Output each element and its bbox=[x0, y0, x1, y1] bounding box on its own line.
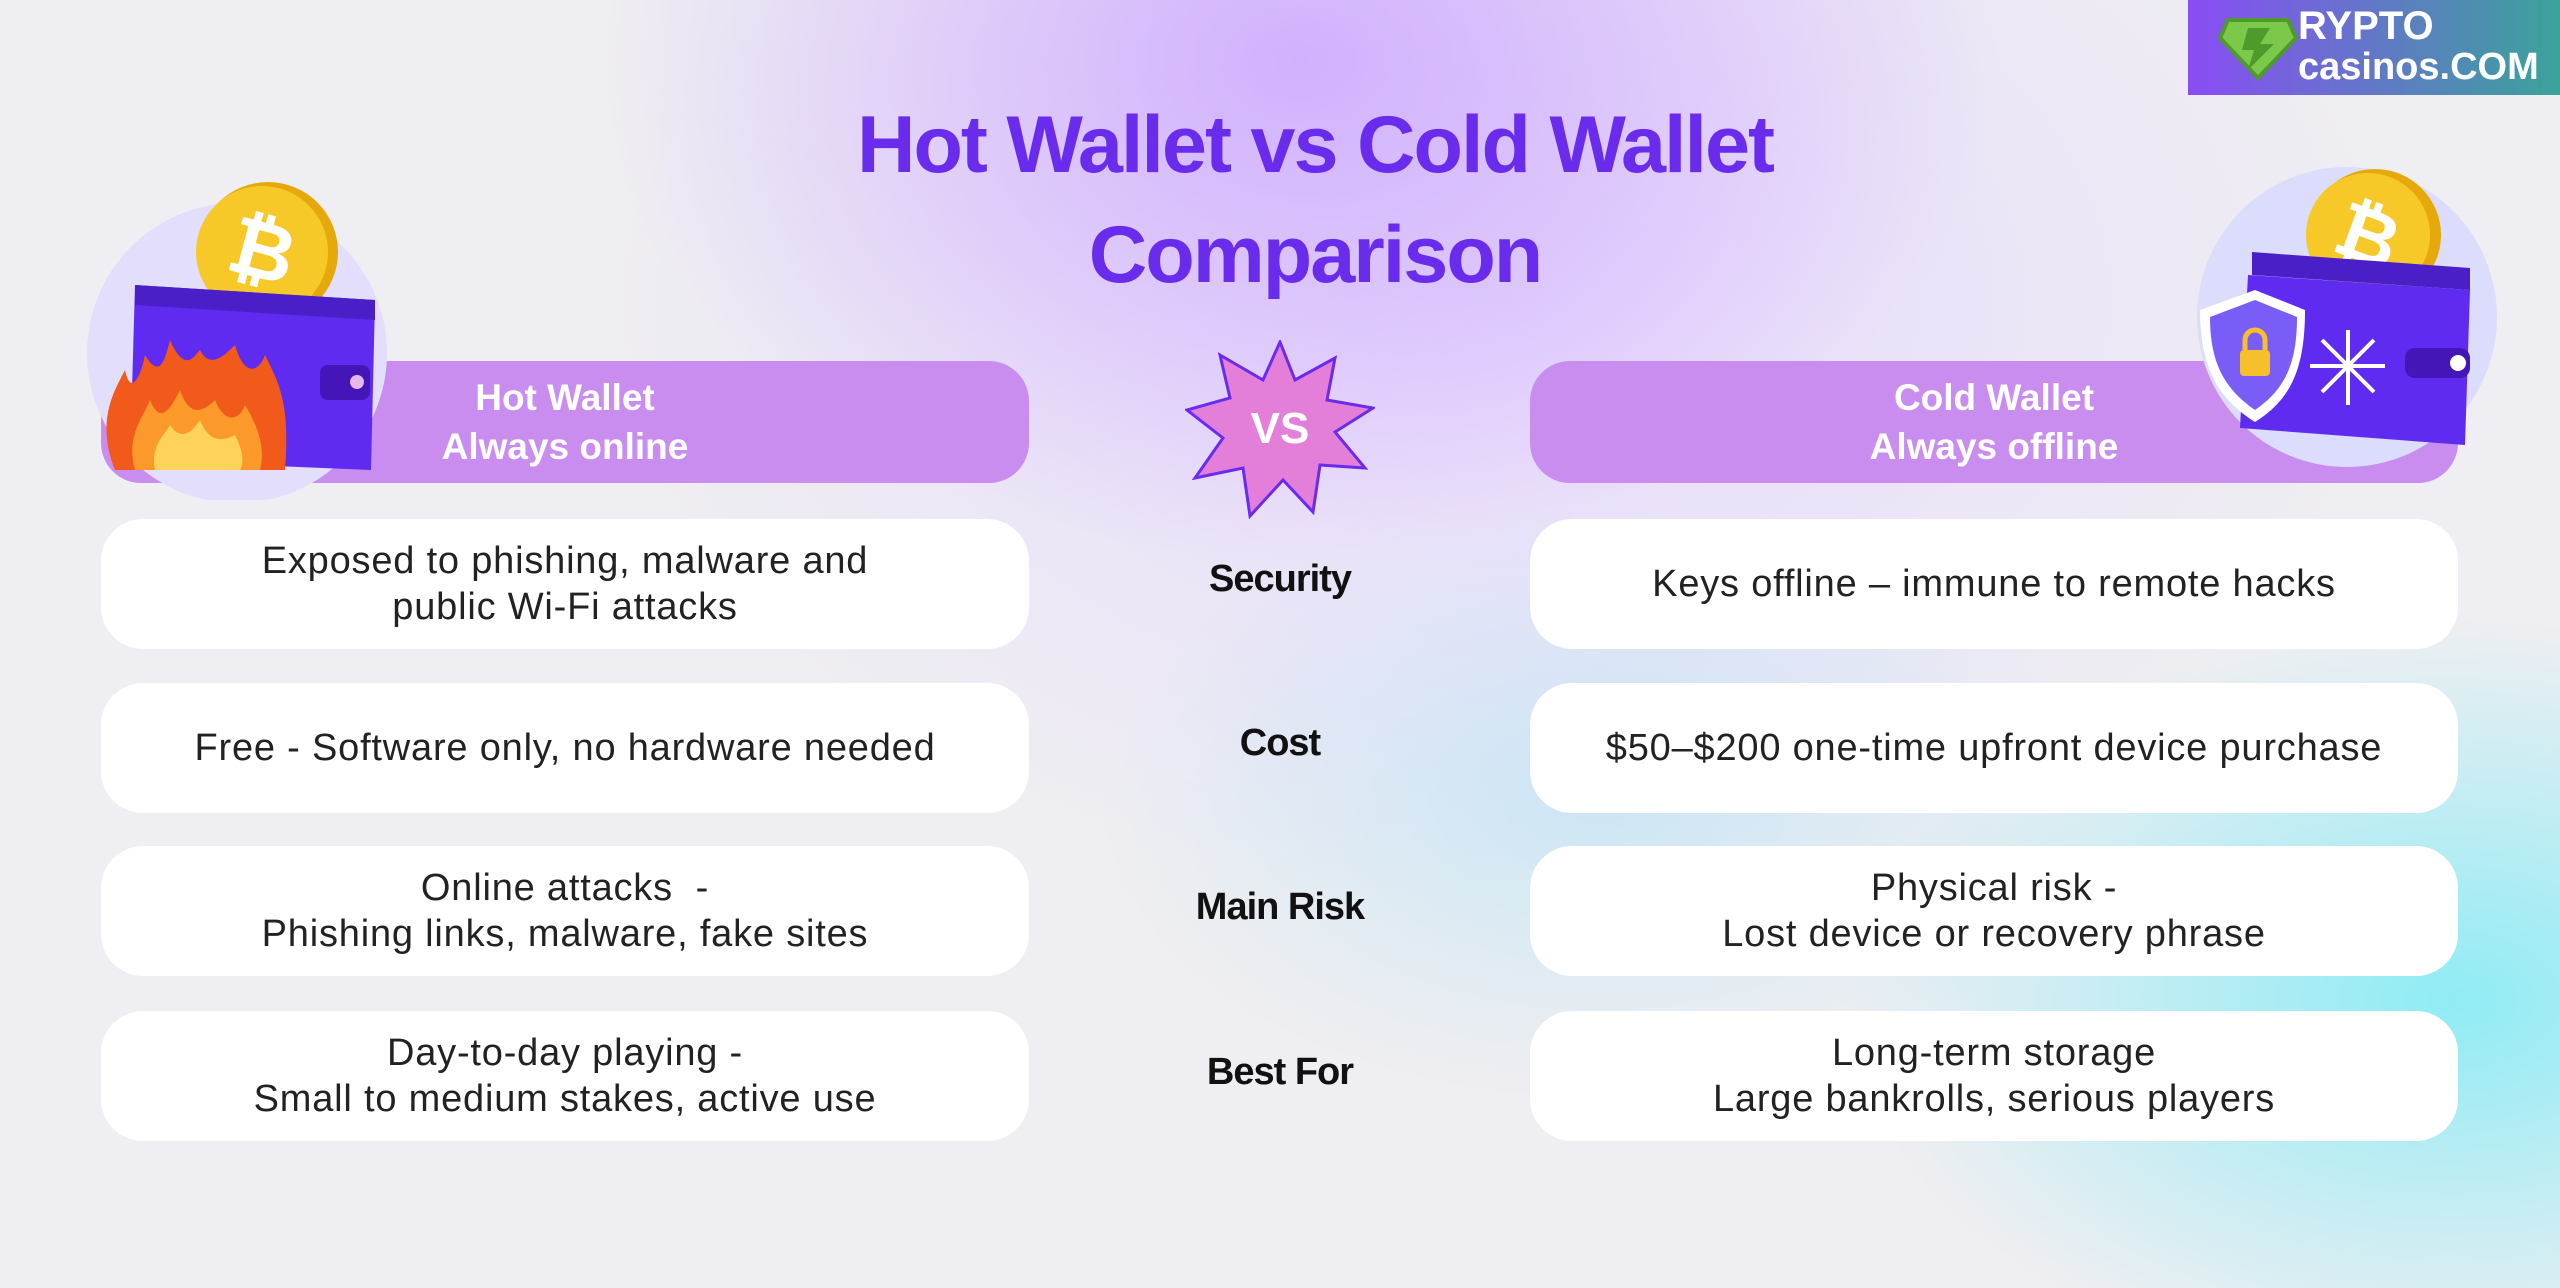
text: Long-term storage bbox=[1832, 1032, 2156, 1074]
label: cost: Cost bbox=[1240, 722, 1320, 764]
row 2: cost bbox=[101, 683, 1029, 813]
text: $50–$200 one-time upfront device purchase bbox=[1606, 727, 2382, 769]
text: Physical risk - bbox=[1871, 867, 2117, 909]
row 4: best for bbox=[101, 1011, 1029, 1141]
text: Large bankrolls, serious players bbox=[1713, 1078, 2275, 1120]
row 3: main risk: Online attacks - bbox=[421, 867, 709, 909]
row 1: security bbox=[101, 519, 1029, 649]
row 4: best for: Day-to-day playing - bbox=[387, 1032, 743, 1074]
icon: cold wallet: ₿ bbox=[2324, 186, 2411, 287]
header: cold wallet: Cold Wallet bbox=[1894, 377, 2094, 418]
icon: VS starburst bbox=[1185, 340, 1375, 520]
icon: VS starburst: VS bbox=[1251, 404, 1309, 453]
row 1: security: Exposed to phishing, malware and bbox=[262, 540, 868, 582]
text: Lost device or recovery phrase bbox=[1722, 913, 2266, 955]
row 4: best for: Small to medium stakes, active use bbox=[254, 1078, 876, 1120]
header: cold wallet bbox=[1530, 361, 2458, 483]
icon: cold wallet bbox=[2197, 167, 2497, 467]
label: best for: Best For bbox=[1207, 1051, 1353, 1093]
row 3: main risk bbox=[101, 846, 1029, 976]
logo text: RYPTO bbox=[2298, 4, 2434, 48]
label: main risk: Main Risk bbox=[1196, 886, 1364, 928]
icon: hot wallet bbox=[87, 182, 387, 500]
logo text: casinos.COM bbox=[2298, 46, 2539, 88]
text: Keys offline – immune to remote hacks bbox=[1652, 563, 2336, 605]
logo bbox=[2188, 0, 2560, 95]
icon: hot wallet: ₿ bbox=[219, 199, 305, 302]
logo text bbox=[2298, 4, 2539, 88]
title: Comparison bbox=[1089, 210, 1541, 300]
row 1: security: public Wi-Fi attacks bbox=[392, 586, 738, 628]
header: hot wallet: Always online bbox=[442, 426, 688, 467]
row 2: cost: Free - Software only, no hardware needed bbox=[194, 727, 936, 769]
title bbox=[857, 100, 1774, 300]
header: hot wallet: Hot Wallet bbox=[475, 377, 655, 418]
title: Hot Wallet vs Cold Wallet bbox=[857, 100, 1773, 190]
row 3: main risk: Phishing links, malware, fake sites bbox=[262, 913, 868, 955]
label: security: Security bbox=[1209, 558, 1351, 600]
icon: diamond bolt bbox=[2218, 18, 2298, 81]
header: hot wallet bbox=[101, 361, 1029, 483]
header: cold wallet: Always offline bbox=[1870, 426, 2118, 467]
